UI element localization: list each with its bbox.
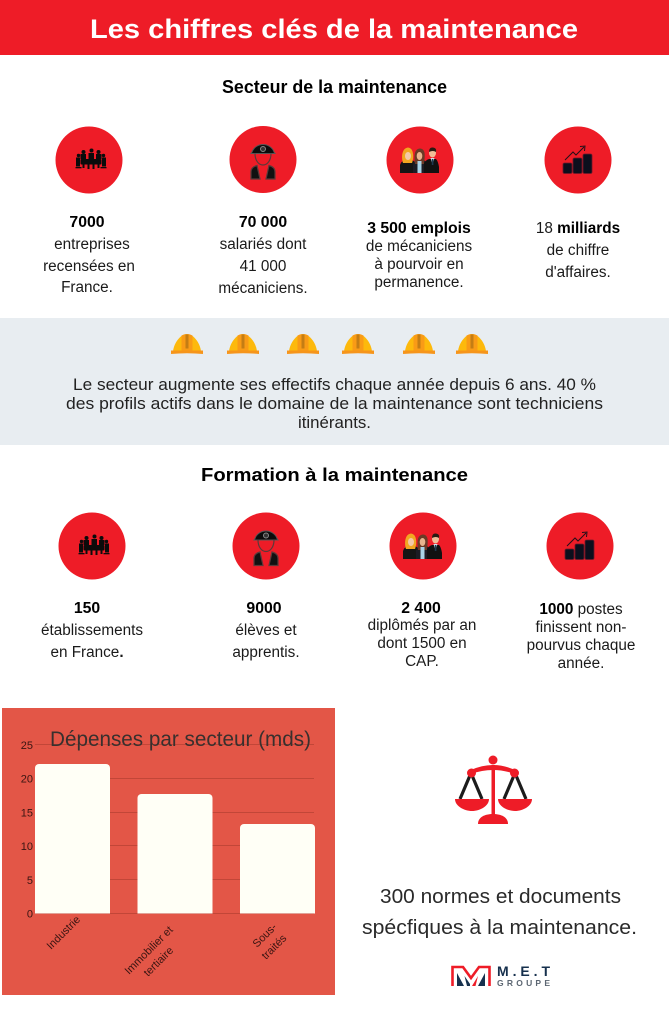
logo: M.E.T groupe [452, 963, 550, 988]
stat: élèves: apprentis. [232, 644, 300, 661]
icon: business team [390, 512, 456, 580]
x axis labels: tertiaire [142, 945, 176, 979]
x axis labels [45, 914, 290, 979]
y axis: 20 [21, 774, 33, 786]
y axis: 25 [21, 740, 33, 752]
title banner [0, 0, 669, 55]
stat: entreprises: recensées en [43, 258, 135, 275]
logo: M.E.T groupe: GROUPE [497, 978, 550, 988]
stat: entreprises: France. [61, 279, 113, 296]
stat: diplômés [368, 600, 476, 670]
y axis: 5 [27, 875, 33, 887]
stat: entreprises: entreprises [54, 236, 130, 253]
heading: formation à la maintenance: Formation à la maintenance [201, 465, 468, 485]
text: normes et documents [362, 886, 637, 939]
y axis: 15 [21, 808, 33, 820]
stat: diplômés: diplômés par an [368, 617, 476, 634]
stat: postes non pourvus: année. [558, 655, 604, 672]
x axis labels: Sous- [251, 921, 280, 950]
icon: meeting table [58, 512, 126, 580]
stat: emplois: 3 500 emplois [367, 220, 471, 237]
stat: élèves: 9000 [246, 600, 282, 617]
bars [35, 764, 315, 914]
x axis labels: Immobilier et [123, 924, 176, 977]
stat: postes non pourvus [527, 601, 635, 672]
paragraph: itinérants. [298, 414, 371, 432]
stat: chiffre d'affaires: 18 milliards [536, 220, 620, 237]
text: normes et documents: spécfiques à la maintenance. [362, 917, 637, 939]
title banner: Les chiffres clés de la maintenance [90, 14, 578, 44]
icon: scales of justice [455, 756, 532, 824]
paragraph [66, 376, 603, 432]
y axis: 10 [21, 841, 33, 853]
paragraph: Le secteur augmente ses effectifs chaque année depuis 6 ans. 40 % [73, 376, 596, 394]
stat: chiffre d'affaires: de chiffre [547, 242, 609, 259]
icon: growing coins [546, 512, 614, 580]
stat: diplômés: 2 400 [401, 600, 441, 617]
stat: établissements [41, 600, 143, 661]
text: normes et documents: 300 normes et documents [380, 886, 621, 908]
stat: postes non pourvus: finissent non- [536, 619, 626, 636]
bar chart: dépenses par secteur [2, 708, 335, 995]
chart title: Dépenses par secteur (mds) [50, 728, 311, 751]
y axis [21, 740, 33, 920]
x axis labels: traités [260, 932, 290, 962]
stat: établissements: en France. [50, 644, 124, 661]
stat: emplois: de mécaniciens [366, 238, 472, 255]
stat: élèves: élèves et [235, 622, 297, 639]
stat: entreprises [43, 214, 135, 296]
stat: chiffre d'affaires: d'affaires. [545, 264, 611, 281]
stat: entreprises: 7000 [69, 214, 105, 231]
icon: growing coins [544, 126, 612, 194]
y axis: 0 [27, 908, 33, 920]
paragraph: des profils actifs dans le domaine de la maintenance sont techniciens [66, 395, 603, 413]
stat: élèves [232, 600, 300, 661]
stat: salariés: 41 000 [240, 258, 286, 275]
stat: chiffre d'affaires [536, 220, 620, 281]
stat: emplois: permanence. [374, 274, 464, 291]
stat: emplois [366, 220, 472, 291]
stat: postes non pourvus: 1000 postes [539, 601, 623, 618]
stat: diplômés: dont 1500 en [377, 635, 467, 652]
stat: établissements: 150 [74, 600, 100, 617]
stat: salariés [218, 214, 308, 297]
logo: M.E.T groupe: M.E.T [497, 963, 550, 979]
stat: postes non pourvus: pourvus chaque [527, 637, 635, 654]
stat: établissements: établissements [41, 622, 143, 639]
x axis labels: Industrie [45, 914, 83, 952]
icon: meeting table [56, 126, 122, 194]
heading: secteur de la maintenance: Secteur de la maintenance [222, 77, 447, 97]
icon: worker with helmet [232, 512, 300, 580]
stat: salariés: 70 000 [239, 214, 287, 231]
icon: business team [386, 126, 454, 194]
stat: diplômés: CAP. [405, 653, 439, 670]
stat: emplois: à pourvoir en [374, 256, 464, 273]
panel: effectifs [0, 318, 669, 445]
icon: worker with helmet [230, 126, 296, 193]
helmet row [171, 334, 488, 354]
stat: salariés: mécaniciens. [218, 280, 308, 297]
stat: salariés: salariés dont [220, 236, 307, 253]
